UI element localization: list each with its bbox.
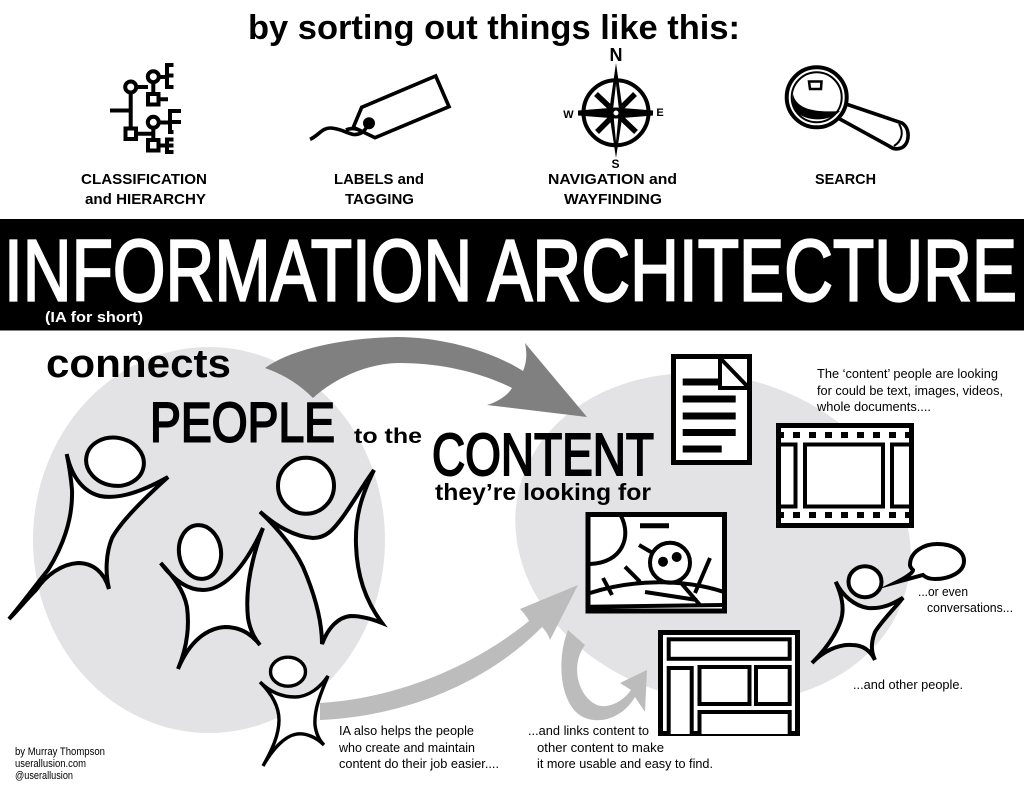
text: creators note: who create and maintain: [338, 740, 475, 755]
icon: picture: [588, 514, 724, 611]
arrow: content links loop: [561, 630, 647, 720]
text: links note: it more usable and easy to find.: [537, 756, 713, 771]
icon: classification and hierarchy tree: [110, 65, 181, 152]
text: content examples note: The ‘content’ people are looking: [817, 366, 998, 381]
text: content examples note: whole documents....: [816, 399, 931, 414]
label: labels and tagging: TAGGING: [345, 191, 414, 208]
text: creators note: IA also helps the people: [339, 723, 474, 738]
text: credits: userallusion.com: [15, 758, 86, 770]
text: links note: other content to make: [537, 740, 664, 755]
label: navigation and wayfinding: NAVIGATION and: [548, 171, 677, 188]
text: creators note: content do their job easier....: [339, 756, 499, 771]
text: content examples note: for could be text, images, videos,: [817, 383, 1003, 398]
text: links note: [528, 723, 713, 771]
text: other people note: ...and other people.: [853, 677, 963, 692]
icon: web page layout: [660, 632, 798, 734]
text: credits: by Murray Thompson: [15, 746, 105, 758]
person 5 with speech bubble: [812, 544, 964, 663]
text: to the: to the: [354, 425, 422, 448]
text: they're looking for: they’re looking for: [435, 479, 651, 505]
label: classification and hierarchy: [81, 171, 207, 208]
text: creators note: [338, 723, 499, 771]
icon: compass: W: [563, 109, 574, 121]
text: CONTENT: CONTENT: [432, 422, 654, 488]
icon: magnifying glass: [787, 67, 908, 149]
text: PEOPLE: PEOPLE: [150, 390, 335, 454]
icon: film strip: [778, 426, 912, 526]
label: classification and hierarchy: and HIERARCHY: [85, 191, 206, 208]
label: classification and hierarchy: CLASSIFICATION: [81, 171, 207, 188]
icon: compass: E: [656, 107, 664, 119]
text: credits: @userallusion: [15, 770, 73, 782]
panel: content circle: [478, 330, 948, 746]
text: content examples note: [816, 366, 1003, 414]
label: navigation and wayfinding: WAYFINDING: [564, 191, 662, 208]
icon: compass: [563, 45, 664, 171]
text: conversations note: [918, 584, 1013, 615]
title banner: (IA for short): [45, 309, 143, 326]
icon: compass: N: [610, 45, 622, 65]
person 2: [161, 522, 263, 669]
icon: luggage tag: [310, 76, 449, 139]
text: connects: connects: [46, 342, 231, 386]
person 4: [260, 657, 328, 766]
person 1: [9, 433, 168, 619]
panel: people circle: [33, 347, 385, 733]
icon: speech bubble: [897, 544, 964, 582]
text: credits: [15, 746, 105, 782]
arrow: creators to content: [320, 585, 578, 720]
text: conversations note: ...or even: [918, 584, 968, 599]
label: labels and tagging: LABELS and: [334, 171, 424, 188]
text: links note: ...and links content to: [528, 723, 649, 738]
top heading: by sorting out things like this:: [248, 9, 740, 47]
icon: compass: S: [611, 157, 620, 171]
icon: document: [674, 356, 750, 462]
label: labels and tagging: [334, 171, 424, 208]
person 3: [260, 458, 382, 644]
label: navigation and wayfinding: [548, 171, 677, 208]
label: search: SEARCH: [815, 171, 876, 188]
text: conversations note: conversations...: [927, 600, 1013, 615]
arrow: people to content: [265, 337, 587, 417]
